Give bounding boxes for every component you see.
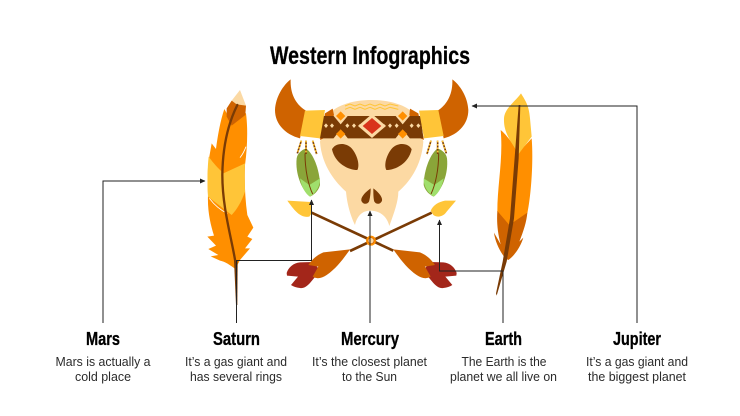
arrowhead: left (287, 201, 312, 217)
small feather: right (424, 141, 447, 197)
label: Saturn (185, 329, 287, 384)
label: Mars: Mars is actually a (56, 355, 151, 369)
label: Saturn: It’s a gas giant and (185, 355, 287, 369)
label: Jupiter (586, 329, 688, 384)
label: Jupiter: Jupiter (613, 329, 661, 349)
feather: left orange (207, 90, 253, 305)
connector: Mars (103, 181, 205, 323)
arrow shafts (312, 213, 432, 251)
label: Mars: Mars (86, 329, 120, 349)
label: Earth: Earth (485, 329, 522, 349)
headband pattern (324, 114, 420, 139)
label: Mercury: to the Sun (342, 370, 397, 384)
label: Jupiter: It’s a gas giant and (586, 355, 688, 369)
eye: left (332, 144, 358, 170)
headband knots (320, 109, 334, 140)
horn: right (438, 79, 468, 138)
nose (361, 188, 382, 204)
zigzag (345, 104, 398, 109)
crossed arrows (287, 201, 457, 288)
skull with headdress (275, 79, 468, 226)
small feather: left (296, 141, 320, 197)
headband diamonds (336, 111, 407, 139)
label: Jupiter: the biggest planet (588, 370, 687, 384)
label: Mars (56, 329, 151, 384)
fletching: right (425, 262, 457, 288)
connector: Mercury (369, 211, 371, 323)
vane: right (393, 249, 435, 278)
connector: Saturn (236, 200, 312, 323)
horn: left (275, 79, 306, 138)
arrowhead: right (431, 201, 456, 217)
connector: Earth (440, 220, 503, 323)
label: Mercury: It’s the closest planet (312, 355, 428, 369)
label: Earth: planet we all live on (450, 370, 557, 384)
vane: left (308, 249, 350, 278)
fletching: left (287, 262, 318, 288)
feather: right orange (494, 93, 532, 296)
headband (319, 116, 423, 138)
label: Saturn: Saturn (213, 329, 260, 349)
label: Earth: The Earth is the (462, 355, 547, 369)
label: Earth (450, 329, 557, 384)
skull (320, 100, 423, 226)
eye: right (385, 144, 412, 170)
label: Mercury (312, 329, 428, 384)
band: left yellow (300, 110, 325, 138)
connector: Jupiter (472, 106, 637, 323)
label: Saturn: has several rings (190, 370, 282, 384)
band: right yellow (419, 110, 444, 138)
label: Mars: cold place (75, 370, 131, 384)
label: Mercury: Mercury (341, 329, 399, 349)
knot (366, 236, 376, 246)
title: Western Infographics (270, 42, 470, 70)
